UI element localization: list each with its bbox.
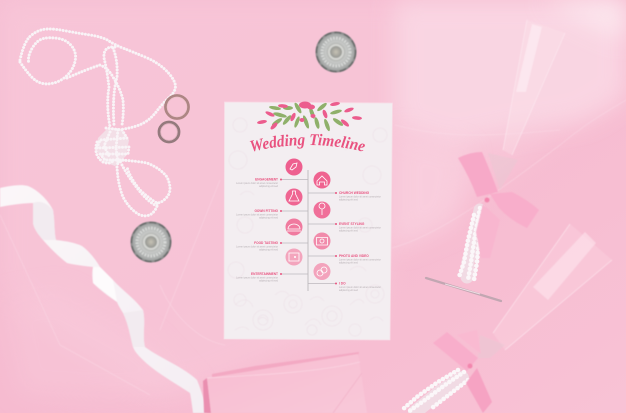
- milestone: entertainment: adipiscing elit sed: [259, 280, 279, 282]
- milestone: church wedding: CHURCH WEDDING: [339, 191, 370, 195]
- milestone: food tasting: FOOD TASTING: [254, 241, 279, 245]
- pink bow: [458, 152, 539, 258]
- envelope: [203, 352, 367, 413]
- milestone: rings: I DO: [339, 282, 346, 286]
- white ribbon: [0, 185, 207, 413]
- title: Wedding Timeline: [250, 134, 365, 152]
- milestone: church wedding: Lorem ipsum dolor sit amet consectetur: [339, 196, 381, 198]
- milestone: entertainment: Lorem ipsum dolor sit amet consectetur: [236, 276, 278, 280]
- pearl stem: [459, 208, 484, 280]
- milestone: entertainment: ENTERTAINMENT: [251, 272, 278, 276]
- milestone: food tasting: Lorem ipsum dolor sit amet consectetur: [236, 246, 278, 248]
- card floral pattern: [228, 118, 387, 336]
- pearl stem: [402, 370, 468, 412]
- glass base: [426, 278, 501, 301]
- milestone: event styling: EVENT STYLING: [339, 222, 365, 226]
- milestone: rings: adipiscing elit sed: [339, 289, 359, 292]
- milestone: church wedding: [308, 172, 381, 202]
- flute bowl: [478, 224, 612, 358]
- necklace knot: [96, 128, 129, 166]
- milestone: engagement: adipiscing elit sed: [259, 185, 279, 188]
- milestone: photo session: PHOTO AND VIDEO: [339, 254, 369, 258]
- milestone: engagement: ENGAGEMENT: [255, 178, 278, 182]
- necklace: pearl strands: [20, 29, 175, 216]
- milestone: entertainment: [236, 248, 308, 282]
- milestone: church wedding: adipiscing elit sed: [339, 198, 359, 202]
- milestone: gown fitting: adipiscing elit sed: [259, 216, 279, 220]
- glass: upper flute with pearl stem and bow: [426, 20, 565, 301]
- milestone: event styling: [308, 202, 381, 232]
- candle: top: [316, 32, 356, 72]
- floral garland: [257, 101, 362, 132]
- milestone: event styling: Lorem ipsum dolor sit amet consectetur: [339, 226, 381, 230]
- milestone: food tasting: adipiscing elit sed: [259, 248, 279, 252]
- milestone: photo session: adipiscing elit sed: [339, 262, 359, 264]
- milestone: engagement: Lorem ipsum dolor sit amet consectetur: [236, 182, 278, 185]
- milestone: rings: [308, 263, 381, 292]
- timeline card: [224, 102, 393, 340]
- milestone: gown fitting: Lorem ipsum dolor sit amet consectetur: [236, 214, 278, 216]
- flute bowl: [488, 20, 565, 190]
- pink bow: [433, 330, 492, 413]
- timeline spine: [307, 170, 309, 291]
- wedding rings: [159, 96, 188, 142]
- milestone: gown fitting: [236, 188, 308, 220]
- milestone: photo session: Lorem ipsum dolor sit amet consectetur: [339, 258, 381, 262]
- milestone: rings: Lorem ipsum dolor sit amet consectetur: [339, 286, 381, 289]
- milestone: food tasting: [236, 218, 308, 252]
- glass: lower flute with pearl stem and bow: [402, 224, 612, 413]
- milestone: photo session: [308, 232, 381, 264]
- milestone: gown fitting: GOWN FITTING: [254, 209, 279, 213]
- milestone: event styling: adipiscing elit sed: [339, 230, 359, 232]
- candle: bottom: [130, 222, 172, 262]
- milestone: engagement: [236, 158, 308, 188]
